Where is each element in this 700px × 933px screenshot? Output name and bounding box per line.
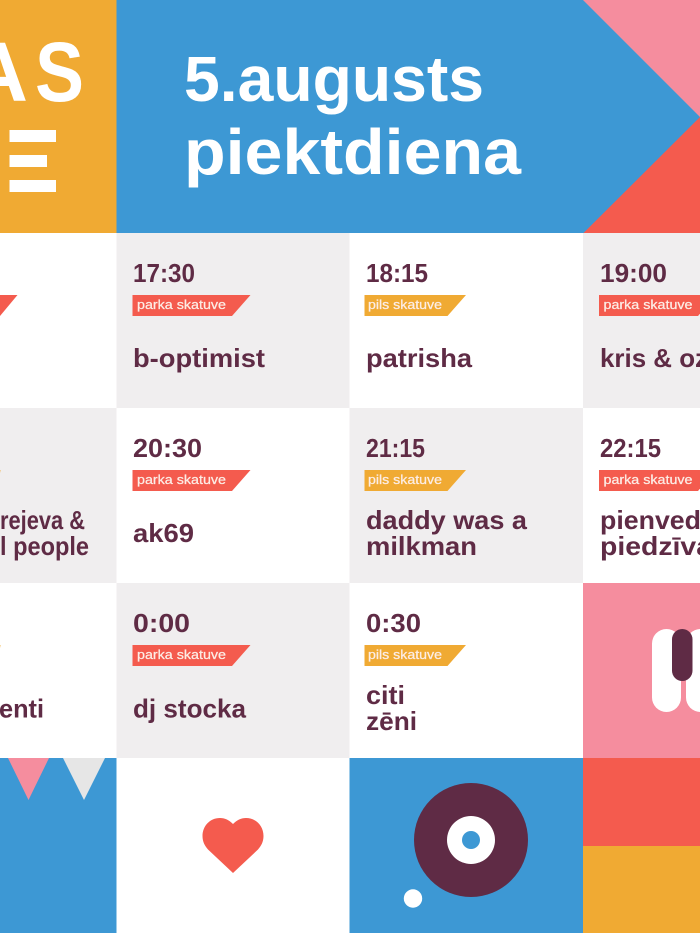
icon: vinyl record bbox=[350, 758, 583, 933]
cell: 21:15 daddy was a milkman: milkman bbox=[366, 531, 477, 561]
cell: 0:00 dj stocka: parka skatuve bbox=[137, 647, 226, 662]
cell: 18:15 patrisha: patrisha bbox=[366, 343, 473, 373]
cell: 17:30 b-optimist: b-optimist bbox=[133, 343, 265, 373]
cell: row 2 column 0: rejeva & bbox=[0, 505, 85, 535]
cell: 18:15 patrisha: 18:15 bbox=[366, 258, 428, 288]
cell: row 2 column 0 bbox=[0, 408, 116, 583]
cell: 19:00 kris & oz: 19:00 bbox=[600, 258, 667, 288]
cell: 17:30 b-optimist: parka skatuve bbox=[137, 297, 226, 312]
cell: 0:30 citi zēni: zēni bbox=[366, 706, 417, 736]
cell: 20:30 ak69: 20:30 bbox=[133, 433, 202, 463]
cell: 19:00 kris & oz: parka skatuve bbox=[604, 297, 692, 312]
icon: heart bbox=[116, 758, 350, 933]
cell: 22:15 pienvedēji: piedzīva bbox=[600, 531, 700, 561]
cell: 17:30 b-optimist bbox=[116, 233, 350, 408]
cell: 20:30 ak69 bbox=[116, 408, 350, 583]
heading: date and weekday: piektdiena bbox=[184, 116, 521, 188]
cell: 22:15 pienvedēji: 22:15 bbox=[600, 433, 661, 463]
cell: 21:15 daddy was a milkman: daddy was a bbox=[366, 505, 528, 535]
cell: 20:30 ak69: ak69 bbox=[133, 518, 194, 548]
heading: date and weekday: 5.augusts bbox=[184, 43, 484, 115]
icon: bunting flags bbox=[0, 758, 116, 933]
icon: piano keys bbox=[583, 583, 700, 758]
cell: row 1 column 0 bbox=[0, 233, 116, 408]
panel: date heading background bbox=[116, 0, 700, 233]
header band bbox=[0, 0, 700, 233]
panel: festival logo fragment: S bbox=[35, 25, 84, 119]
cell: 22:15 pienvedēji: pienved bbox=[600, 505, 700, 535]
cell: 22:15 pienvedēji bbox=[583, 408, 700, 583]
cell: 0:30 citi zēni bbox=[350, 583, 583, 758]
cell: 21:15 daddy was a milkman bbox=[350, 408, 583, 583]
cell: 22:15 pienvedēji: parka skatuve bbox=[604, 472, 692, 487]
cell: 21:15 daddy was a milkman: 21:15 bbox=[366, 433, 425, 463]
cell: 0:30 citi zēni: pils skatuve bbox=[368, 647, 442, 662]
cell: 20:30 ak69: parka skatuve bbox=[137, 472, 226, 487]
cell: 17:30 b-optimist: 17:30 bbox=[133, 258, 195, 288]
cell: 18:15 patrisha bbox=[350, 233, 583, 408]
schedule grid bbox=[0, 233, 700, 758]
cell: 18:15 patrisha: pils skatuve bbox=[368, 297, 442, 312]
cell: 0:30 citi zēni: 0:30 bbox=[366, 608, 421, 638]
cell: row 3 column 0: enti bbox=[0, 694, 44, 724]
panel: festival logo fragment bbox=[0, 0, 116, 233]
cell: 0:00 dj stocka: dj stocka bbox=[133, 694, 247, 724]
cell: 0:00 dj stocka bbox=[116, 583, 350, 758]
cell: row 3 column 0 bbox=[0, 583, 116, 758]
arrow: header corner triangles bbox=[583, 0, 700, 233]
panel: colour blocks bbox=[583, 758, 700, 933]
cell: row 2 column 0: l people bbox=[0, 531, 89, 561]
cell: 19:00 kris & oz bbox=[583, 233, 700, 408]
cell: 0:30 citi zēni: citi bbox=[366, 680, 405, 710]
cell: 0:00 dj stocka: 0:00 bbox=[133, 608, 190, 638]
bottom decorative row bbox=[0, 758, 700, 933]
cell: 21:15 daddy was a milkman: pils skatuve bbox=[368, 472, 442, 487]
heading: date and weekday bbox=[184, 43, 521, 188]
